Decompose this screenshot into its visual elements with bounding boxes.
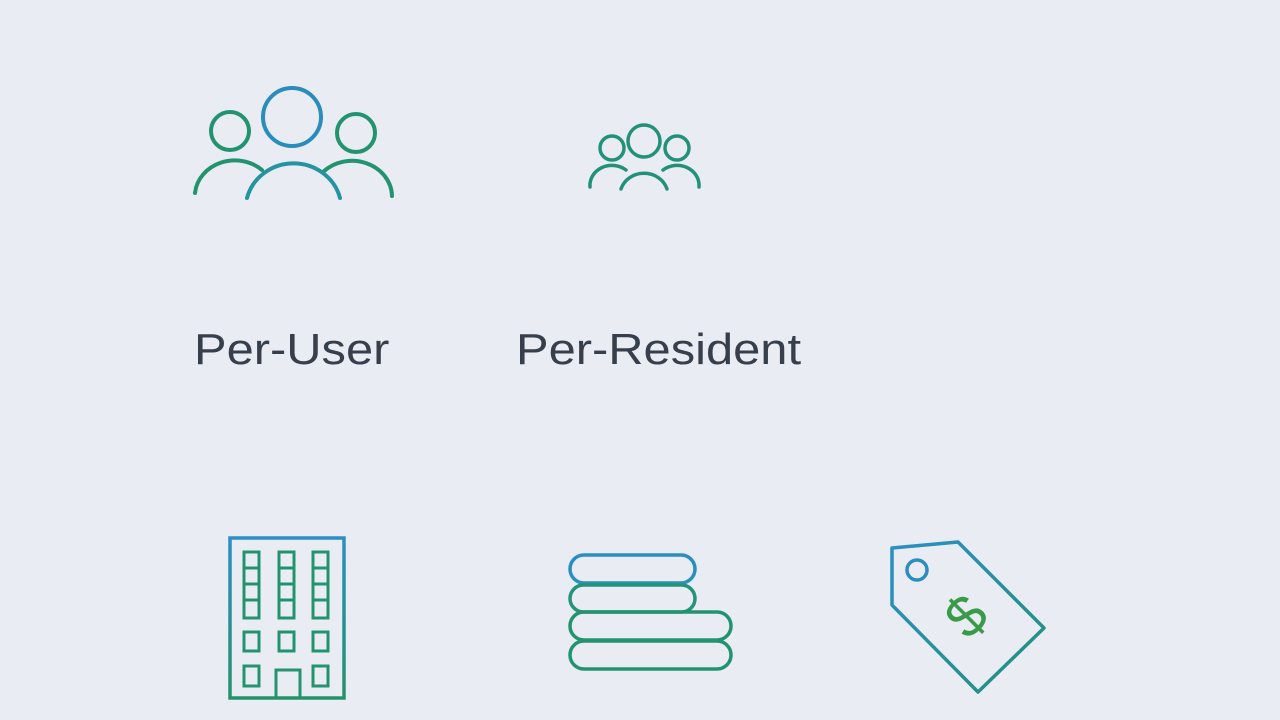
icon: price tag: $ xyxy=(932,582,1001,651)
icon: coin stack xyxy=(570,555,731,669)
icon: price tag xyxy=(892,542,1044,692)
label: Per-User: Per-User xyxy=(194,325,389,374)
icon: building xyxy=(230,538,344,698)
icon: large group of people xyxy=(195,88,392,198)
icon: small group of people xyxy=(590,125,699,189)
label: Per-Resident: Per-Resident xyxy=(516,325,801,374)
